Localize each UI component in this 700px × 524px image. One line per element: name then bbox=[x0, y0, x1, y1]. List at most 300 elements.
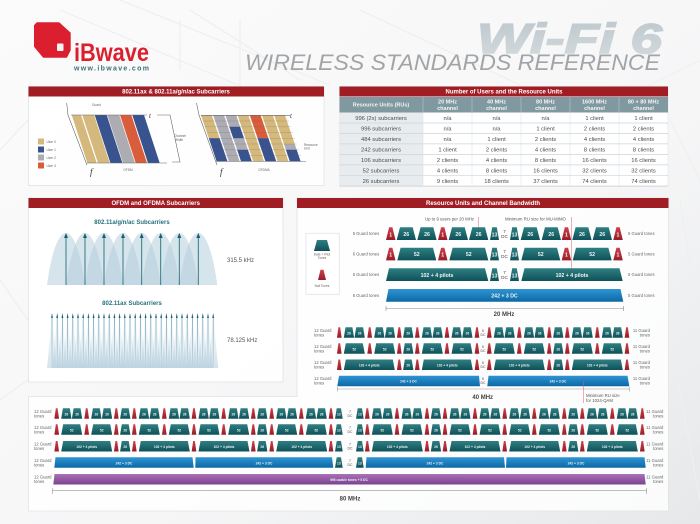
80 MHz row 2: 52-tone RUs: 52 bbox=[518, 428, 522, 432]
80 MHz row 1: 26-tone RUs: 11 Guard bbox=[646, 409, 664, 414]
80 MHz row 2: 52-tone RUs: 52 bbox=[147, 428, 151, 432]
table body: 1 client bbox=[585, 116, 604, 122]
table body: 242 subcarriers bbox=[361, 148, 401, 154]
40 MHz row 3: 106-tone RUs: 26 bbox=[406, 364, 410, 368]
80 MHz row 2: 52-tone RUs: tones bbox=[653, 429, 663, 434]
80 MHz row 1: 26-tone RUs: 26 bbox=[483, 412, 487, 416]
80 MHz row 5: 996-tone RU: 996 usable tones + 5 DC bbox=[330, 478, 369, 482]
40 MHz row 1: 26-tone RUs: 26 bbox=[556, 331, 560, 335]
80 MHz row 3: 106-tone RUs: 26 bbox=[571, 445, 575, 449]
80 MHz row 4: 242-tone RUs: 12 Guard bbox=[34, 458, 52, 463]
20 MHz row 1: 26-tone RUs: 1 bbox=[441, 232, 444, 238]
20 MHz row 3: 106-tone RUs bbox=[353, 268, 655, 281]
20 MHz row 1: 26-tone RUs: 7 bbox=[503, 229, 506, 234]
legend: users bbox=[38, 138, 56, 168]
80 MHz row 3: 106-tone RUs: 102 + 4 pilots bbox=[602, 445, 623, 449]
80 MHz row 1: 26-tone RUs: 26 bbox=[260, 412, 264, 416]
80 MHz row 1: 26-tone RUs bbox=[34, 408, 664, 419]
40 MHz row 1: 26-tone RUs: tones bbox=[314, 332, 324, 337]
chart: OFDMA grid: Unit bbox=[304, 146, 310, 150]
40 MHz row 1: 26-tone RUs: DC bbox=[481, 333, 486, 337]
chart title: legacy subcarriers: 802.11a/g/n/ac Subcarriers bbox=[94, 220, 170, 226]
table header row: channel bbox=[633, 106, 654, 112]
chart: OFDMA grid: t bbox=[290, 112, 293, 120]
table header row: 20 MHz bbox=[438, 100, 457, 106]
legend: tone types: Tones bbox=[318, 256, 327, 260]
panel: subcarriers comparison bbox=[28, 86, 324, 186]
20 MHz row 1: 26-tone RUs: 1 bbox=[389, 232, 392, 238]
80 MHz row 2: 52-tone RUs: 11 Guard bbox=[646, 425, 664, 430]
40 MHz bracket: 40 MHz bbox=[472, 395, 493, 401]
chart: OFDM stripes: OFDM bbox=[123, 168, 133, 172]
table body: 52 subcarriers bbox=[363, 168, 399, 174]
40 MHz row 2: 52-tone RUs: 52 bbox=[430, 347, 434, 351]
40 MHz bracket bbox=[337, 387, 629, 401]
80 MHz row 3: 106-tone RUs bbox=[34, 441, 664, 452]
80 MHz row 1: 26-tone RUs: 26 bbox=[95, 412, 98, 416]
20 MHz row 3: 106-tone RUs: 7 bbox=[503, 270, 506, 275]
80 MHz row 3: 106-tone RUs: tones bbox=[34, 446, 44, 451]
40 MHz row 1: 26-tone RUs: 26 bbox=[508, 331, 512, 335]
80 MHz row 1: 26-tone RUs: 7 bbox=[349, 410, 351, 414]
40 MHz row 1: 26-tone RUs: 12 Guard bbox=[314, 328, 332, 333]
40 MHz row 1: 26-tone RUs: 26 bbox=[436, 331, 440, 335]
80 MHz row 2: 52-tone RUs: 52 bbox=[595, 428, 599, 432]
table body: 8 clients bbox=[535, 158, 556, 164]
80 MHz row 1: 26-tone RUs: 26 bbox=[620, 412, 624, 416]
80 MHz row 4: 242-tone RUs: 13 bbox=[337, 461, 341, 465]
title: Wi-Fi 6: Wi-Fi 6 bbox=[477, 15, 663, 62]
80 MHz row 2: 52-tone RUs: 26 bbox=[571, 428, 575, 432]
80 MHz row 4: 242-tone RUs: 242 + 3 DC bbox=[116, 461, 133, 465]
annotation: minimum RU for MU-MIMO bbox=[505, 216, 572, 275]
table body: 2 clients bbox=[584, 126, 605, 132]
annotation: up to 9 users: Up to 9 users per 20 MHz bbox=[425, 216, 474, 222]
40 MHz row 4: 242-tone RUs: 12 Guard bbox=[314, 376, 332, 381]
80 MHz row 2: 52-tone RUs: 7 bbox=[349, 426, 351, 430]
20 MHz row 2: 52-tone RUs: 7 bbox=[503, 249, 506, 254]
80 MHz row 3: 106-tone RUs: tones bbox=[653, 446, 663, 451]
80 MHz row 1: 26-tone RUs: 26 bbox=[142, 412, 146, 416]
40 MHz row 4: 242-tone RUs: DC bbox=[481, 381, 486, 385]
table body: 4 clients bbox=[584, 137, 605, 143]
table header row: 1600 MHz bbox=[582, 100, 607, 106]
80 MHz row 5: 996-tone RU bbox=[34, 474, 664, 484]
40 MHz row 1: 26-tone RUs: 26 bbox=[575, 331, 579, 335]
80 MHz row 2: 52-tone RUs: 26 bbox=[434, 428, 438, 432]
40 MHz row 3: 106-tone RUs: DC bbox=[481, 365, 486, 369]
chart title: 802.11ax subcarriers: 802.11ax Subcarriers bbox=[102, 301, 163, 307]
80 MHz row 1: 26-tone RUs: 26 bbox=[309, 412, 313, 416]
80 MHz row 2: 52-tone RUs: 52 bbox=[237, 428, 241, 432]
20 MHz row 1: 26-tone RUs: 13 bbox=[492, 232, 497, 238]
40 MHz row 2: 52-tone RUs: 52 bbox=[383, 347, 387, 351]
80 MHz row 1: 26-tone RUs: 26 bbox=[320, 412, 324, 416]
80 MHz row 3: 106-tone RUs: 102 + 4 pilots bbox=[154, 445, 175, 449]
20 MHz row 1: 26-tone RUs: 13 bbox=[512, 232, 517, 238]
80 MHz row 1: 26-tone RUs: 26 bbox=[513, 412, 516, 416]
table body: 16 clients bbox=[533, 168, 558, 174]
40 MHz row 4: 242-tone RUs: 5 bbox=[482, 377, 484, 381]
80 MHz row 3: 106-tone RUs: 13 bbox=[337, 445, 341, 449]
20 MHz row 3: 106-tone RUs: 5 Guard tones bbox=[628, 272, 655, 277]
40 MHz row 2: 52-tone RUs: 11 Guard bbox=[633, 344, 651, 349]
80 MHz row 4: 242-tone RUs: tones bbox=[653, 462, 663, 467]
80 MHz row 1: 26-tone RUs: 26 bbox=[405, 412, 409, 416]
80 MHz row 3: 106-tone RUs: 26 bbox=[260, 445, 264, 449]
80 MHz row 1: 26-tone RUs: 26 bbox=[542, 412, 546, 416]
40 MHz row 2: 52-tone RUs: 52 bbox=[610, 347, 614, 351]
table body: 8 clients bbox=[633, 148, 654, 154]
80 MHz row 2: 52-tone RUs: tones bbox=[34, 429, 44, 434]
80 MHz row 1: 26-tone RUs: 26 bbox=[213, 412, 216, 416]
table header row bbox=[340, 97, 668, 112]
40 MHz row 1: 26-tone RUs: 26 bbox=[378, 331, 381, 335]
legend: users: User 0 bbox=[46, 140, 56, 144]
80 MHz row 2: 52-tone RUs: 13 bbox=[337, 428, 341, 432]
table body bbox=[340, 112, 668, 186]
40 MHz row 1: 26-tone RUs: 26 bbox=[347, 331, 351, 335]
80 MHz row 1: 26-tone RUs: 26 bbox=[631, 412, 635, 416]
80 MHz row 1: 26-tone RUs: 26 bbox=[202, 412, 206, 416]
20 MHz row 1: 26-tone RUs: 26 bbox=[424, 232, 430, 238]
40 MHz row 3: 106-tone RUs: 11 Guard bbox=[633, 360, 651, 365]
table body: 484 subcarriers bbox=[361, 137, 401, 143]
40 MHz row 2: 52-tone RUs: tones bbox=[640, 348, 650, 353]
annotation: minimum RU for 1024-QAM: for 1024-QAM bbox=[586, 398, 613, 403]
table body: 16 clients bbox=[631, 158, 656, 164]
annotation: up to 9 users bbox=[425, 216, 479, 230]
40 MHz row 1: 26-tone RUs: 26 bbox=[616, 331, 620, 335]
20 MHz row 2: 52-tone RUs: 13 bbox=[512, 253, 517, 259]
80 MHz row 3: 106-tone RUs: 102 + 4 pilots bbox=[214, 445, 235, 449]
80 MHz row 2: 52-tone RUs: 52 bbox=[458, 428, 462, 432]
40 MHz row 3: 106-tone RUs: 102 + 4 pilots bbox=[437, 364, 458, 368]
annotation: minimum RU for MU-MIMO: Minimum RU size for MU-MIMO bbox=[505, 216, 567, 222]
40 MHz row 2: 52-tone RUs: 52 bbox=[502, 347, 506, 351]
table header row: Resource Units (RUs) bbox=[353, 102, 409, 108]
icon: red logo mark bbox=[35, 23, 70, 57]
80 MHz row 2: 52-tone RUs: 26 bbox=[260, 428, 264, 432]
80 MHz row 1: 26-tone RUs: 13 bbox=[358, 412, 362, 416]
80 MHz row 1: 26-tone RUs: DC bbox=[348, 414, 353, 418]
80 MHz row 1: 26-tone RUs: 26 bbox=[386, 412, 390, 416]
40 MHz row 1: 26-tone RUs: 26 bbox=[425, 331, 429, 335]
80 MHz row 1: 26-tone RUs: 26 bbox=[453, 412, 457, 416]
80 MHz row 2: 52-tone RUs: 52 bbox=[207, 428, 211, 432]
40 MHz row 2: 52-tone RUs: 12 Guard bbox=[314, 344, 332, 349]
logo wordmark: iBwave bbox=[74, 39, 149, 67]
table header row: channel bbox=[437, 106, 458, 112]
20 MHz row 2: 52-tone RUs: DC bbox=[501, 254, 508, 259]
20 MHz row 4: 242-tone RU: 5 Guard tones bbox=[628, 293, 655, 298]
40 MHz row 1: 26-tone RUs: 26 bbox=[538, 331, 542, 335]
table body: 37 clients bbox=[533, 179, 558, 185]
80 MHz row 1: 26-tone RUs: 26 bbox=[280, 412, 283, 416]
40 MHz row 1: 26-tone RUs: 26 bbox=[406, 331, 410, 335]
heading: OFDM and OFDMA: OFDM and OFDMA Subcarriers bbox=[111, 201, 201, 207]
20 MHz row 1: 26-tone RUs: 1 bbox=[565, 232, 568, 238]
80 MHz row 2: 52-tone RUs: 52 bbox=[547, 428, 551, 432]
table header row: channel bbox=[486, 106, 507, 112]
80 MHz row 2: 52-tone RUs: 52 bbox=[70, 428, 74, 432]
80 MHz row 5: 996-tone RU: 11 Guard bbox=[646, 474, 664, 480]
chart: OFDMA grid bbox=[196, 103, 318, 177]
panel: OFDM and OFDMA subcarriers bbox=[28, 198, 283, 382]
20 MHz row 2: 52-tone RUs: 52 bbox=[414, 252, 420, 258]
80 MHz row 3: 106-tone RUs: 11 Guard bbox=[646, 442, 664, 446]
20 MHz row 2: 52-tone RUs: 1 bbox=[389, 253, 392, 259]
annotation: minimum RU for 1024-QAM bbox=[584, 381, 620, 403]
40 MHz row 1: 26-tone RUs: 26 bbox=[586, 331, 590, 335]
table header row: 80 + 80 MHz bbox=[628, 100, 659, 106]
80 MHz row 4: 242-tone RUs: 242 + 3 DC bbox=[256, 461, 273, 465]
20 MHz row 2: 52-tone RUs: 52 bbox=[466, 252, 472, 258]
table body: n/a bbox=[443, 137, 452, 143]
20 MHz row 1: 26-tone RUs: 26 bbox=[579, 232, 585, 238]
80 MHz row 2: 52-tone RUs: 13 bbox=[358, 428, 362, 432]
table body: 996 subcarriers bbox=[361, 126, 401, 132]
80 MHz row 1: 26-tone RUs: 26 bbox=[65, 412, 68, 416]
table body: n/a bbox=[541, 116, 550, 122]
40 MHz row 4: 242-tone RUs bbox=[314, 376, 651, 386]
80 MHz row 2: 52-tone RUs: 52 bbox=[177, 428, 181, 432]
20 MHz row 2: 52-tone RUs: 1 bbox=[441, 253, 444, 259]
20 MHz row 2: 52-tone RUs: 5 Guard tones bbox=[628, 251, 655, 256]
40 MHz row 2: 52-tone RUs: 52 bbox=[580, 347, 584, 351]
heading: table title: Number of Users and the Resource Units bbox=[445, 90, 563, 96]
20 MHz bracket bbox=[386, 306, 624, 318]
80 MHz row 4: 242-tone RUs: tones bbox=[34, 462, 44, 467]
20 MHz row 1: 26-tone RUs: 26 bbox=[455, 232, 461, 238]
40 MHz row 3: 106-tone RUs: 102 + 4 pilots bbox=[359, 364, 380, 368]
80 MHz row 1: 26-tone RUs: 26 bbox=[75, 412, 79, 416]
panel: resource units and channel bandwidth bbox=[28, 198, 668, 511]
80 MHz row 1: 26-tone RUs: 26 bbox=[553, 412, 557, 416]
table body: 996 (2x) subcarriers bbox=[355, 116, 407, 122]
80 MHz row 5: 996-tone RU: tones bbox=[653, 479, 663, 484]
80 MHz row 5: 996-tone RU: 12 Guard bbox=[34, 474, 52, 480]
40 MHz row 3: 106-tone RUs: tones bbox=[640, 364, 650, 370]
40 MHz row 2: 52-tone RUs: 52 bbox=[352, 347, 356, 351]
20 MHz row 1: 26-tone RUs: 5 Guard tones bbox=[628, 231, 655, 236]
table body: 18 clients bbox=[484, 179, 509, 185]
80 MHz row 2: 52-tone RUs: 52 bbox=[314, 428, 318, 432]
80 MHz row 3: 106-tone RUs: DC bbox=[348, 447, 353, 451]
80 MHz row 1: 26-tone RUs: 26 bbox=[416, 412, 419, 416]
20 MHz row 1: 26-tone RUs: 26 bbox=[548, 232, 554, 238]
80 MHz row 2: 52-tone RUs: 26 bbox=[123, 428, 127, 432]
table body: 32 clients bbox=[582, 168, 607, 174]
chart: OFDM stripes: f bbox=[90, 167, 94, 177]
80 MHz row 1: 26-tone RUs: tones bbox=[653, 413, 663, 418]
80 MHz row 4: 242-tone RUs: DC bbox=[348, 463, 353, 467]
80 MHz row 1: 26-tone RUs: 26 bbox=[290, 412, 294, 416]
80 MHz row 3: 106-tone RUs: 7 bbox=[349, 442, 351, 446]
80 MHz row 2: 52-tone RUs: DC bbox=[348, 430, 353, 434]
80 MHz row 4: 242-tone RUs: 11 Guard bbox=[646, 458, 664, 463]
80 MHz row 3: 106-tone RUs: 26 bbox=[434, 445, 438, 449]
80 MHz row 4: 242-tone RUs: 242 + 3 DC bbox=[568, 461, 585, 465]
20 MHz row 2: 52-tone RUs: 1 bbox=[617, 253, 620, 259]
20 MHz row 4: 242-tone RU: 6 Guard tones bbox=[353, 293, 379, 298]
table body: 2 clients bbox=[633, 126, 654, 132]
40 MHz row 2: 52-tone RUs: 26 bbox=[556, 347, 560, 351]
value: 315.5 kHz: 315.5 kHz bbox=[227, 258, 254, 264]
40 MHz row 4: 242-tone RUs: 242 + 3 DC bbox=[550, 380, 567, 384]
table body: 16 clients bbox=[582, 158, 607, 164]
20 MHz row 2: 52-tone RUs: 13 bbox=[492, 253, 497, 259]
80 MHz bracket: 80 MHz bbox=[340, 496, 360, 502]
40 MHz row 4: 242-tone RUs: tones bbox=[640, 381, 650, 386]
80 MHz row 3: 106-tone RUs: 26 bbox=[123, 445, 127, 449]
table body: 4 clients bbox=[535, 148, 556, 154]
80 MHz row 2: 52-tone RUs: 12 Guard bbox=[34, 425, 52, 430]
20 MHz row 1: 26-tone RUs: 26 bbox=[599, 232, 605, 238]
80 MHz row 2: 52-tone RUs bbox=[34, 424, 664, 435]
table body: 8 clients bbox=[486, 168, 507, 174]
40 MHz row 3: 106-tone RUs: 102 + 4 pilots bbox=[587, 364, 608, 368]
40 MHz row 2: 52-tone RUs: 5 bbox=[482, 345, 484, 349]
chart: OFDMA grid: Resource bbox=[304, 143, 318, 147]
20 MHz row 3: 106-tone RUs: DC bbox=[501, 275, 508, 280]
table body: 9 clients bbox=[437, 179, 458, 185]
chart: OFDM stripes: t bbox=[149, 112, 152, 120]
table body: 74 clients bbox=[582, 179, 607, 185]
20 MHz row 3: 106-tone RUs: 13 bbox=[512, 273, 517, 279]
table body: n/a bbox=[443, 116, 452, 122]
80 MHz row 1: 26-tone RUs: 12 Guard bbox=[34, 409, 52, 414]
20 MHz row 3: 106-tone RUs: 6 Guard tones bbox=[353, 272, 379, 277]
80 MHz row 2: 52-tone RUs: 52 bbox=[100, 428, 104, 432]
table header row: 40 MHz bbox=[487, 100, 506, 106]
80 MHz row 1: 26-tone RUs: 26 bbox=[232, 412, 235, 416]
20 MHz row 1: 26-tone RUs: 26 bbox=[527, 232, 533, 238]
20 MHz row 3: 106-tone RUs: 13 bbox=[492, 273, 497, 279]
legend: users: User 2 bbox=[46, 156, 56, 160]
20 MHz row 4: 242-tone RU bbox=[353, 289, 655, 302]
heading: resource units: Resource Units and Channel Bandwidth bbox=[426, 201, 540, 207]
40 MHz row 1: 26-tone RUs: tones bbox=[640, 332, 650, 337]
20 MHz row 3: 106-tone RUs: 102 + 4 pilots bbox=[556, 273, 588, 279]
80 MHz row 2: 52-tone RUs: 52 bbox=[380, 428, 384, 432]
20 MHz row 1: 26-tone RUs bbox=[353, 227, 655, 240]
legend: tone types: Data + Pilot bbox=[314, 252, 330, 256]
table body: n/a bbox=[443, 126, 452, 132]
40 MHz row 3: 106-tone RUs: tones bbox=[314, 364, 324, 370]
chart: OFDMA grid: OFDMA bbox=[258, 168, 271, 172]
table body: 1 client bbox=[487, 137, 506, 143]
80 MHz row 1: 26-tone RUs: 26 bbox=[375, 412, 379, 416]
40 MHz row 1: 26-tone RUs: 26 bbox=[497, 331, 501, 335]
80 MHz row 2: 52-tone RUs: 52 bbox=[488, 428, 492, 432]
40 MHz row 1: 26-tone RUs: 26 bbox=[358, 331, 362, 335]
80 MHz row 1: 26-tone RUs: 26 bbox=[183, 412, 187, 416]
80 MHz row 1: 26-tone RUs: 26 bbox=[571, 412, 575, 416]
80 MHz row 3: 106-tone RUs: 102 + 4 pilots bbox=[291, 445, 312, 449]
80 MHz row 5: 996-tone RU: tones bbox=[34, 479, 44, 484]
icon: logo square bbox=[57, 44, 64, 51]
legend: users: User 1 bbox=[46, 148, 56, 152]
20 MHz row 3: 106-tone RUs: 102 + 4 pilots bbox=[421, 273, 453, 279]
40 MHz row 2: 52-tone RUs: DC bbox=[481, 349, 486, 353]
40 MHz row 1: 26-tone RUs: 26 bbox=[605, 331, 609, 335]
80 MHz row 3: 106-tone RUs: 13 bbox=[358, 445, 362, 449]
20 MHz row 1: 26-tone RUs: 26 bbox=[403, 232, 409, 238]
table body: n/a bbox=[492, 126, 501, 132]
table header row: 80 MHz bbox=[536, 100, 555, 106]
40 MHz row 2: 52-tone RUs: 26 bbox=[406, 347, 410, 351]
20 MHz row 1: 26-tone RUs: 1 bbox=[617, 232, 620, 238]
table body: 2 clients bbox=[535, 137, 556, 143]
table body: 4 clients bbox=[633, 137, 654, 143]
80 MHz row 1: 26-tone RUs: 26 bbox=[494, 412, 497, 416]
value: 78.125 kHz: 78.125 kHz bbox=[227, 338, 257, 344]
80 MHz row 4: 242-tone RUs: 7 bbox=[349, 459, 351, 463]
80 MHz bracket bbox=[52, 488, 647, 502]
40 MHz row 3: 106-tone RUs bbox=[314, 360, 651, 370]
80 MHz row 3: 106-tone RUs: 102 + 4 pilots bbox=[76, 445, 97, 449]
80 MHz row 1: 26-tone RUs: 26 bbox=[523, 412, 527, 416]
40 MHz row 2: 52-tone RUs: 52 bbox=[460, 347, 464, 351]
40 MHz row 3: 106-tone RUs: 5 bbox=[482, 361, 484, 365]
table body: 2 clients bbox=[437, 158, 458, 164]
40 MHz row 3: 106-tone RUs: 102 + 4 pilots bbox=[509, 364, 530, 368]
panel: users and resource units table bbox=[340, 86, 668, 186]
20 MHz row 1: 26-tone RUs: DC bbox=[501, 234, 508, 239]
40 MHz row 1: 26-tone RUs: 26 bbox=[466, 331, 469, 335]
40 MHz row 3: 106-tone RUs: 12 Guard bbox=[314, 360, 332, 365]
chart: OFDM stripes: Channel bbox=[174, 134, 186, 138]
40 MHz row 4: 242-tone RUs: 11 Guard bbox=[633, 376, 651, 381]
legend: users: User 3 bbox=[46, 164, 56, 168]
table body: 1 client bbox=[536, 126, 555, 132]
80 MHz row 1: 26-tone RUs: 13 bbox=[337, 412, 341, 416]
table body: 106 subcarriers bbox=[361, 158, 401, 164]
40 MHz row 1: 26-tone RUs: 26 bbox=[388, 331, 392, 335]
table body: 74 clients bbox=[631, 179, 656, 185]
80 MHz row 1: 26-tone RUs: 26 bbox=[153, 412, 157, 416]
table header row: channel bbox=[584, 106, 605, 112]
table body: n/a bbox=[492, 116, 501, 122]
table body: 1 client bbox=[438, 148, 457, 154]
chart: OFDM stripes: Guard bbox=[92, 103, 101, 107]
table body: 1 client bbox=[634, 116, 653, 122]
80 MHz row 1: 26-tone RUs: 26 bbox=[434, 412, 438, 416]
heading: subcarriers: 802.11ax & 802.11a/g/n/ac Subcarriers bbox=[122, 90, 231, 96]
20 MHz row 2: 52-tone RUs bbox=[353, 248, 655, 260]
table header row: channel bbox=[535, 106, 556, 112]
20 MHz row 4: 242-tone RU: 242 + 3 DC bbox=[491, 294, 518, 300]
20 MHz row 2: 52-tone RUs: 6 Guard tones bbox=[353, 251, 379, 256]
40 MHz row 2: 52-tone RUs: 52 bbox=[532, 347, 536, 351]
logo url: www.ibwave.com bbox=[73, 66, 149, 72]
chart: OFDMA grid: f bbox=[220, 167, 224, 177]
20 MHz row 2: 52-tone RUs: 52 bbox=[538, 252, 544, 258]
80 MHz row 1: 26-tone RUs: 26 bbox=[242, 412, 246, 416]
table body: 4 clients bbox=[437, 168, 458, 174]
40 MHz row 2: 52-tone RUs bbox=[314, 343, 651, 354]
80 MHz row 1: 26-tone RUs: 26 bbox=[601, 412, 605, 416]
40 MHz row 1: 26-tone RUs: 26 bbox=[527, 331, 531, 335]
table body: 8 clients bbox=[584, 148, 605, 154]
80 MHz row 2: 52-tone RUs: 52 bbox=[410, 428, 414, 432]
80 MHz row 1: 26-tone RUs: 26 bbox=[464, 412, 467, 416]
80 MHz row 4: 242-tone RUs: 242 + 3 DC bbox=[427, 461, 444, 465]
40 MHz row 4: 242-tone RUs: tones bbox=[314, 381, 324, 386]
chart: OFDM stripes: Width bbox=[175, 138, 183, 142]
80 MHz row 3: 106-tone RUs: 102 + 4 pilots bbox=[524, 445, 545, 449]
